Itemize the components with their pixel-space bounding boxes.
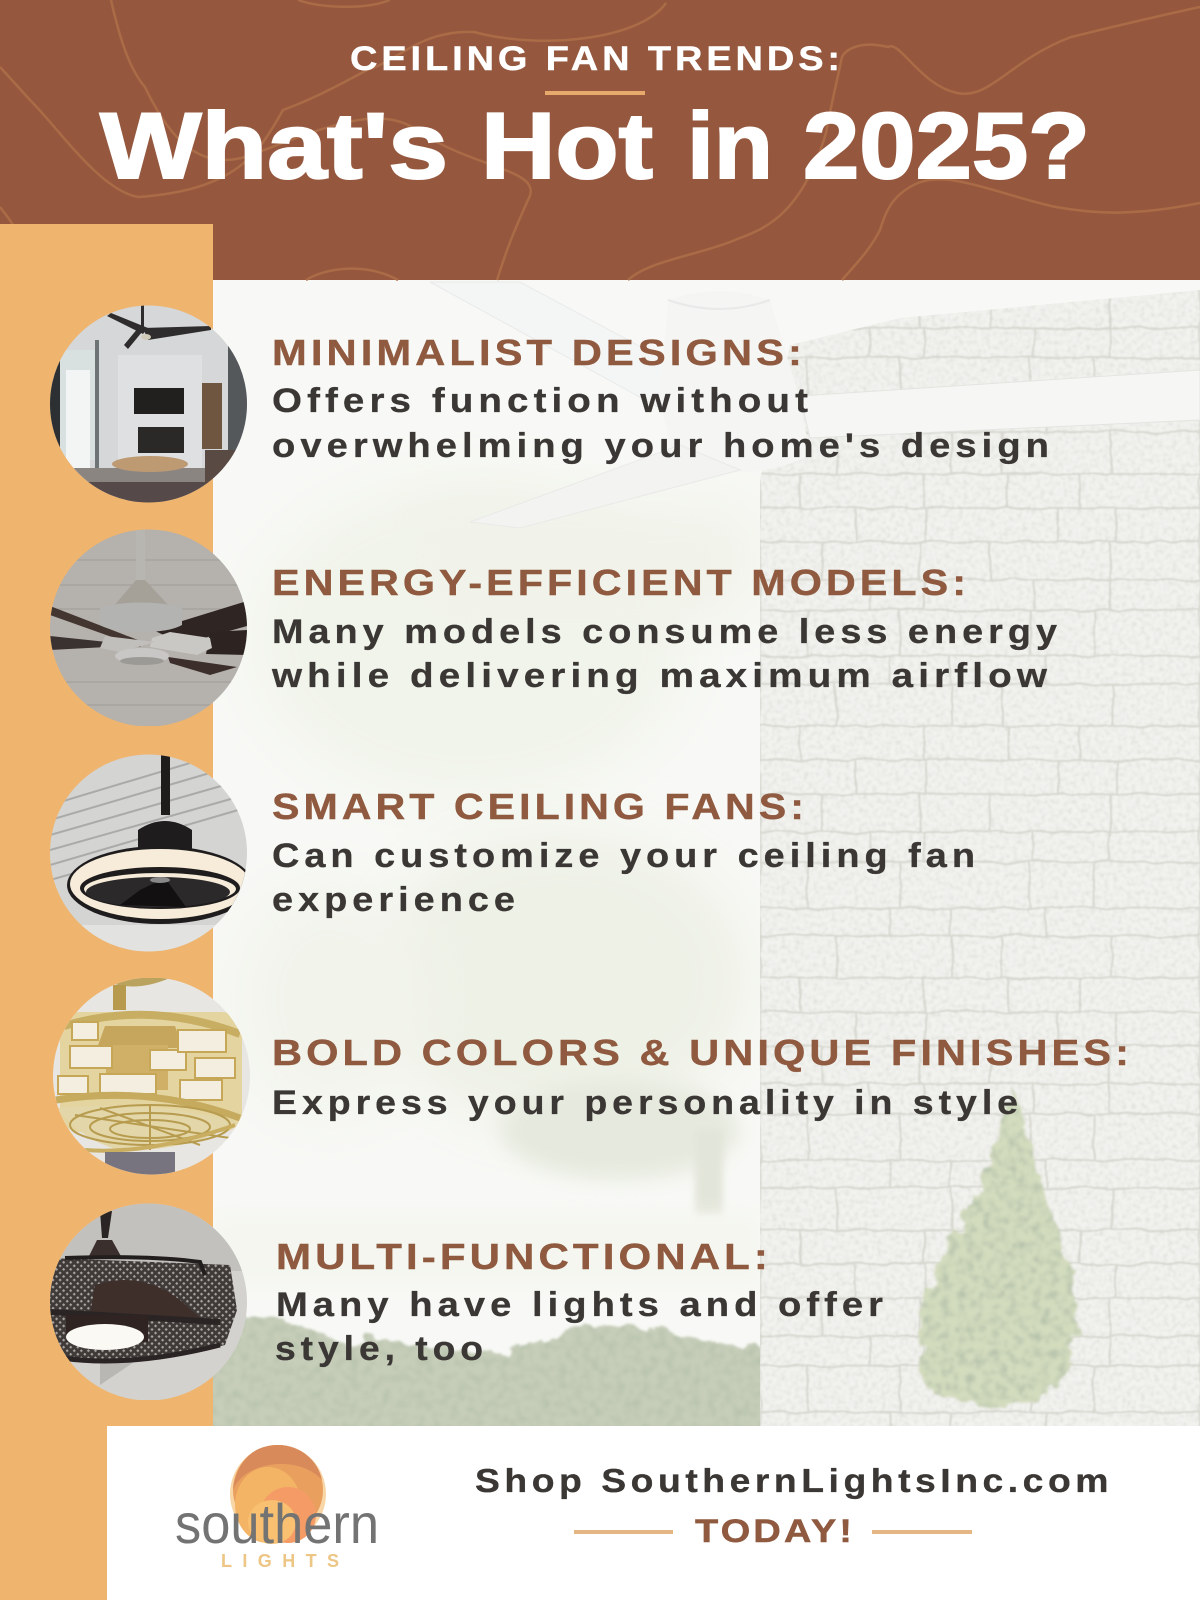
photo circle: smart fan with light ring — [50, 754, 253, 955]
shrub — [919, 1085, 1076, 1405]
description: style, too — [275, 1330, 488, 1368]
logo: Southern Lights — [175, 1445, 379, 1571]
description: Many have lights and offer — [276, 1286, 888, 1324]
description: Offers function without — [272, 382, 813, 420]
bushes — [213, 1315, 760, 1426]
background photo: fan, trees and stone wall — [190, 275, 1200, 1450]
description: experience — [272, 881, 520, 919]
heading: MULTI-FUNCTIONAL: — [276, 1236, 772, 1277]
description — [271, 613, 1062, 695]
description: Express your personality in style — [272, 1084, 1023, 1122]
heading: ENERGY-EFFICIENT MODELS: — [272, 562, 970, 603]
ghost white ceiling fan — [430, 282, 1200, 528]
trend 5: multi-functional — [275, 1236, 888, 1368]
photo circle: minimalist living room — [50, 305, 248, 504]
description: Many models consume less energy — [272, 613, 1062, 651]
tree foliage — [262, 482, 746, 1216]
description: Can customize your ceiling fan — [272, 837, 980, 875]
logo subword: LIGHTS — [221, 1551, 339, 1571]
photo circle: black mesh fan with light — [50, 1203, 247, 1400]
title: in — [687, 93, 773, 198]
call to action: Shop SouthernLightsInc.com — [475, 1462, 1113, 1499]
trend 3: smart ceiling fans — [272, 786, 980, 919]
description — [272, 837, 980, 919]
trend 2: energy-efficient models — [271, 562, 1062, 695]
description — [272, 382, 1054, 465]
today label: TODAY! — [695, 1513, 855, 1549]
trend 1: minimalist designs — [272, 332, 1054, 465]
trend 4: bold colors and unique finishes — [272, 1032, 1133, 1122]
title: Hot — [481, 93, 653, 198]
photo circle: energy-efficient fan — [50, 529, 247, 726]
stone wall — [740, 275, 1200, 1440]
heading: Ceiling Fan Trends: CEILING FAN TRENDS: — [350, 40, 844, 78]
title: 2025? — [803, 93, 1090, 198]
title: What's — [100, 93, 448, 198]
logo wordmark: southern — [175, 1492, 379, 1555]
heading: SMART CEILING FANS: — [272, 786, 808, 827]
header band — [0, 0, 1200, 280]
left orange column — [0, 224, 213, 1600]
footer panel — [107, 1426, 1200, 1600]
today label — [574, 1513, 972, 1549]
description: overwhelming your home's design — [272, 427, 1054, 465]
logo sun icon — [230, 1445, 326, 1544]
heading: BOLD COLORS & UNIQUE FINISHES: — [272, 1032, 1133, 1073]
description: while delivering maximum airflow — [271, 657, 1052, 695]
photo circle: gold and crystal fan — [53, 978, 250, 1176]
title — [100, 93, 1090, 198]
heading: MINIMALIST DESIGNS: — [272, 332, 806, 373]
accent bar under heading — [545, 91, 645, 95]
description — [275, 1286, 888, 1368]
